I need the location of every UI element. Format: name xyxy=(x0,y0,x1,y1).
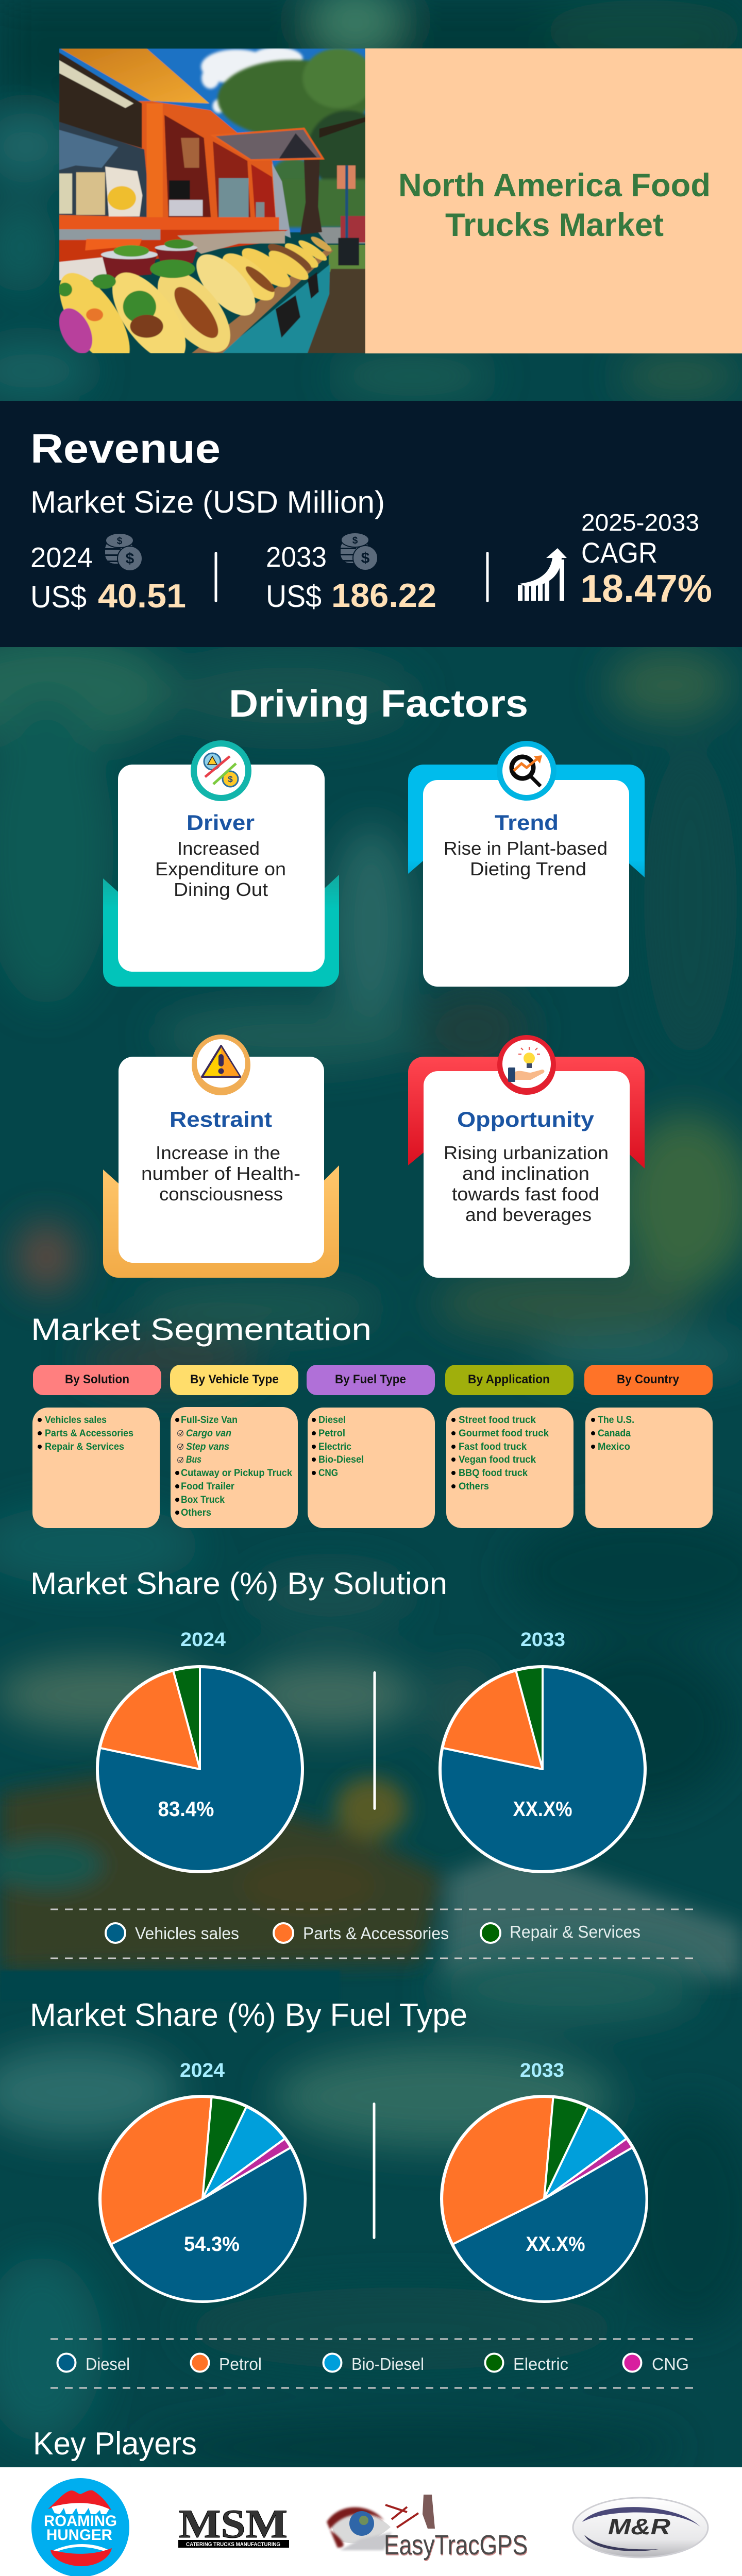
pie chart: solution 2024: 83.4% xyxy=(158,1797,214,1821)
heading: driver: Driver xyxy=(187,810,255,835)
heading: market segmentation: Market Segmentation xyxy=(31,1312,372,1347)
icon: restraint xyxy=(192,1035,250,1095)
panel: segment by fuel type: By Fuel Type xyxy=(335,1372,406,1386)
panel: segment by solution: By Solution xyxy=(65,1372,129,1386)
text: opportunity body: Rising urbanization xyxy=(444,1142,609,1163)
heading: revenue: Revenue xyxy=(30,426,221,471)
stat: CAGR: 2025-2033 xyxy=(581,509,699,536)
panel: segment by vehicle type: Food Trailer xyxy=(181,1481,235,1492)
title panel xyxy=(365,48,742,353)
heading: key players: Key Players xyxy=(33,2426,197,2462)
divider xyxy=(373,1671,376,1810)
logo: easytracgps: EasyTracGPS xyxy=(384,2530,528,2561)
logo: easytracgps xyxy=(327,2495,528,2562)
text: restraint body: number of Health- xyxy=(141,1163,300,1184)
stat: CAGR: CAGR xyxy=(581,536,657,569)
pie chart: solution 2033 xyxy=(440,1667,645,1872)
stat: 2024: 2024 xyxy=(30,541,93,573)
logo: roaming hunger: ROAMING xyxy=(44,2513,117,2530)
panel: segment by solution: Vehicles sales xyxy=(45,1415,107,1426)
pie chart: solution 2024 xyxy=(97,1667,302,1872)
text: driver body: Increased xyxy=(177,838,260,859)
panel: segment by vehicle type: Full-Size Van xyxy=(181,1415,238,1426)
stat: 2033 xyxy=(266,541,436,614)
icon: coins 2024: $ xyxy=(117,536,123,547)
stat: CAGR xyxy=(580,509,712,610)
text: restraint body xyxy=(141,1142,300,1205)
title xyxy=(398,167,711,243)
label: 2024 solution: 2024 xyxy=(180,1629,226,1651)
panel: segment by country: Mexico xyxy=(598,1442,630,1452)
icon: coins 2024: $ xyxy=(126,550,134,567)
legend: solution xyxy=(50,1909,694,1958)
text: opportunity body xyxy=(444,1142,609,1225)
logo: easytracgps: EasyTracGPS xyxy=(384,2531,528,2562)
text: opportunity body: and beverages xyxy=(465,1204,592,1225)
legend: fuel type: Petrol xyxy=(219,2354,262,2374)
legend: fuel type: Electric xyxy=(513,2354,568,2374)
panel: key players xyxy=(0,2467,742,2576)
text: trend body xyxy=(444,838,608,879)
panel: opportunity xyxy=(408,1035,645,1278)
heading: market share by solution: Market Share (%) By Solution xyxy=(30,1566,447,1601)
panel: segment by application: By Application xyxy=(468,1372,550,1386)
text: restraint body: consciousness xyxy=(159,1183,283,1205)
pie chart: fuel 2024 xyxy=(100,2096,305,2301)
legend: fuel type: Diesel xyxy=(86,2354,130,2374)
text: trend body: Rise in Plant-based xyxy=(444,838,608,859)
text: restraint body: Increase in the xyxy=(156,1142,280,1163)
legend: fuel type: Bio-Diesel xyxy=(351,2354,424,2374)
panel: segment by country: The U.S. xyxy=(598,1415,634,1426)
stat: 2024: 40.51 xyxy=(98,577,186,615)
title: North America Food xyxy=(398,167,711,204)
legend: fuel type: CNG xyxy=(652,2354,689,2374)
panel: segment by fuel type: Diesel xyxy=(318,1415,346,1426)
panel: trend xyxy=(408,741,645,987)
label: 2033 solution: 2033 xyxy=(520,1629,565,1651)
panel: segment by application: BBQ food truck xyxy=(459,1468,528,1479)
panel: segment by application: Vegan food truck xyxy=(459,1454,536,1465)
panel: driver xyxy=(103,740,339,987)
panel: segment by application xyxy=(445,1365,574,1528)
heading: trend: Trend xyxy=(495,810,559,835)
panel: segment by country: By Country xyxy=(617,1372,680,1386)
label: 2033 fuel: 2033 xyxy=(520,2060,564,2081)
text: driver body xyxy=(155,838,286,900)
panel: segment by fuel type: Petrol xyxy=(318,1428,345,1439)
panel: segment by vehicle type: By Vehicle Type xyxy=(190,1372,279,1386)
text: opportunity body: towards fast food xyxy=(452,1183,599,1205)
legend: fuel type xyxy=(50,2339,694,2388)
divider xyxy=(214,552,217,602)
panel: segment by solution: Repair & Services xyxy=(45,1442,124,1452)
logo: MSM: MSM xyxy=(179,2501,288,2546)
text: market size: Market Size (USD Million) xyxy=(30,485,385,519)
text: opportunity body: and inclination xyxy=(462,1163,589,1184)
panel: segment by fuel type: Electric xyxy=(318,1442,351,1452)
icon: coins 2024 xyxy=(105,533,142,571)
pie chart: solution 2033: XX.X% xyxy=(513,1797,572,1821)
stat: CAGR: 18.47% xyxy=(580,567,712,610)
panel: segment by fuel type: Bio-Diesel xyxy=(318,1454,364,1465)
label: 2024 fuel: 2024 xyxy=(180,2060,225,2081)
panel: segment by vehicle type: Bus xyxy=(186,1454,201,1465)
panel: segment by vehicle type: Box Truck xyxy=(181,1495,225,1505)
icon: growth arrow xyxy=(518,548,567,601)
panel: segment by country xyxy=(584,1365,713,1528)
photo: food truck with row of tacos xyxy=(59,48,365,353)
logo: roaming hunger: HUNGER xyxy=(46,2527,112,2544)
stat: 2033: 186.22 xyxy=(331,577,436,614)
panel: hero banner xyxy=(46,47,742,377)
stat: 2033: 2033 xyxy=(266,541,327,573)
panel: segment by application: Others xyxy=(459,1481,489,1492)
stat: 2033: US$ xyxy=(266,579,322,614)
title: Trucks Market xyxy=(445,207,664,243)
panel: segment by vehicle type: Cutaway or Pickup Truck xyxy=(181,1468,292,1479)
icon: trend xyxy=(497,741,556,801)
icon: driver xyxy=(191,740,251,801)
text: driver body: Dining Out xyxy=(174,879,268,900)
heading: restraint: Restraint xyxy=(170,1107,272,1131)
logo: M&R: M&R xyxy=(608,2514,670,2539)
pie chart: fuel 2033 xyxy=(442,2096,647,2301)
panel: segment by vehicle type: Cargo van xyxy=(186,1428,231,1439)
panel: segment by country: Canada xyxy=(598,1428,631,1439)
icon: coins 2033 xyxy=(341,533,378,570)
panel: segment by application: Street food truck xyxy=(459,1415,536,1426)
heading: opportunity: Opportunity xyxy=(457,1107,595,1131)
panel: segment by application: Gourmet food truck xyxy=(459,1428,549,1439)
text: trend body: Dieting Trend xyxy=(470,858,586,879)
logo: MSM: CATERING TRUCKS MANUFACTURING xyxy=(186,2541,280,2548)
panel: restraint xyxy=(103,1035,339,1278)
panel: segment by vehicle type: Others xyxy=(181,1507,211,1518)
legend: solution: Parts & Accessories xyxy=(303,1924,449,1943)
panel: segment by solution xyxy=(32,1365,161,1528)
divider xyxy=(486,552,488,602)
legend: solution: Repair & Services xyxy=(510,1922,640,1941)
heading: driving factors: Driving Factors xyxy=(229,682,528,725)
panel: segment by vehicle type: Step vans xyxy=(186,1442,229,1452)
divider xyxy=(373,2103,375,2239)
logo: M&R xyxy=(573,2498,708,2557)
stat: 2024 xyxy=(30,541,186,615)
panel: segment by fuel type: CNG xyxy=(318,1468,338,1479)
icon: opportunity xyxy=(497,1035,556,1095)
logo: roaming hunger xyxy=(31,2478,129,2576)
stat: 2024: US$ xyxy=(30,580,87,614)
panel: segment by application: Fast food truck xyxy=(459,1442,527,1452)
panel: segment by solution: Parts & Accessories xyxy=(45,1428,133,1439)
pie chart: fuel 2024: 54.3% xyxy=(184,2233,240,2256)
icon: coins 2033: $ xyxy=(352,535,358,546)
pie chart: fuel 2033: XX.X% xyxy=(526,2233,585,2256)
text: driver body: Expenditure on xyxy=(155,858,286,879)
icon: coins 2033: $ xyxy=(361,550,370,567)
panel: segment by fuel type xyxy=(307,1365,435,1528)
legend: solution: Vehicles sales xyxy=(135,1924,239,1943)
icon: driver: $ xyxy=(228,774,233,784)
panel: segment by vehicle type xyxy=(170,1365,298,1528)
heading: market share by fuel type: Market Share (%) By Fuel Type xyxy=(30,1997,467,2033)
panel: revenue band xyxy=(0,401,742,647)
